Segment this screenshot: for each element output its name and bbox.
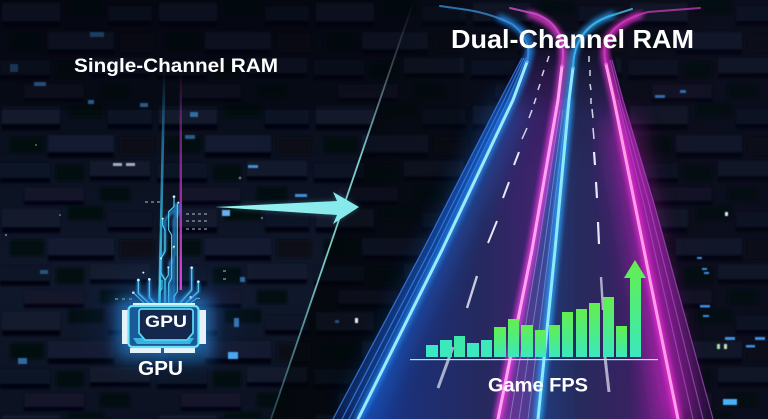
road surface (333, 40, 713, 419)
right lane (538, 50, 678, 419)
distance fade (482, 40, 632, 143)
label: GPU: GPU (138, 358, 183, 380)
road glow bands (358, 100, 513, 419)
heading: dual-channel RAM: Dual-Channel RAM (451, 24, 694, 54)
divider line (271, 0, 414, 419)
circuit traces fanning out from GPU (132, 195, 200, 304)
icon: GPU chip (116, 296, 212, 360)
far-end branch traces (440, 6, 528, 62)
left outer shoulder (333, 50, 531, 419)
board solder dots (5, 144, 263, 300)
panel: dual-channel highway (260, 0, 768, 419)
board component lights (10, 32, 307, 364)
chip label: GPU (145, 312, 187, 331)
left lane (358, 50, 564, 419)
chip pins (122, 303, 206, 353)
center median (498, 50, 574, 419)
heading: single-channel RAM: Single-Channel RAM (74, 55, 278, 77)
up arrow (624, 260, 646, 357)
label: game FPS: Game FPS (488, 376, 588, 396)
bar chart: game FPS (410, 260, 658, 360)
median stripes (510, 110, 566, 419)
lane dashes (438, 56, 609, 392)
channel lines: single cyan and magenta (158, 70, 182, 306)
chart baseline (410, 359, 658, 360)
panel: single-channel circuit board (0, 0, 420, 419)
road shoulder rails (333, 58, 526, 419)
right board lights (335, 90, 765, 405)
neon lanes: curved blue and pink channels (358, 6, 700, 419)
arrow: single to dual (215, 192, 359, 224)
right outer shoulder (604, 50, 713, 419)
